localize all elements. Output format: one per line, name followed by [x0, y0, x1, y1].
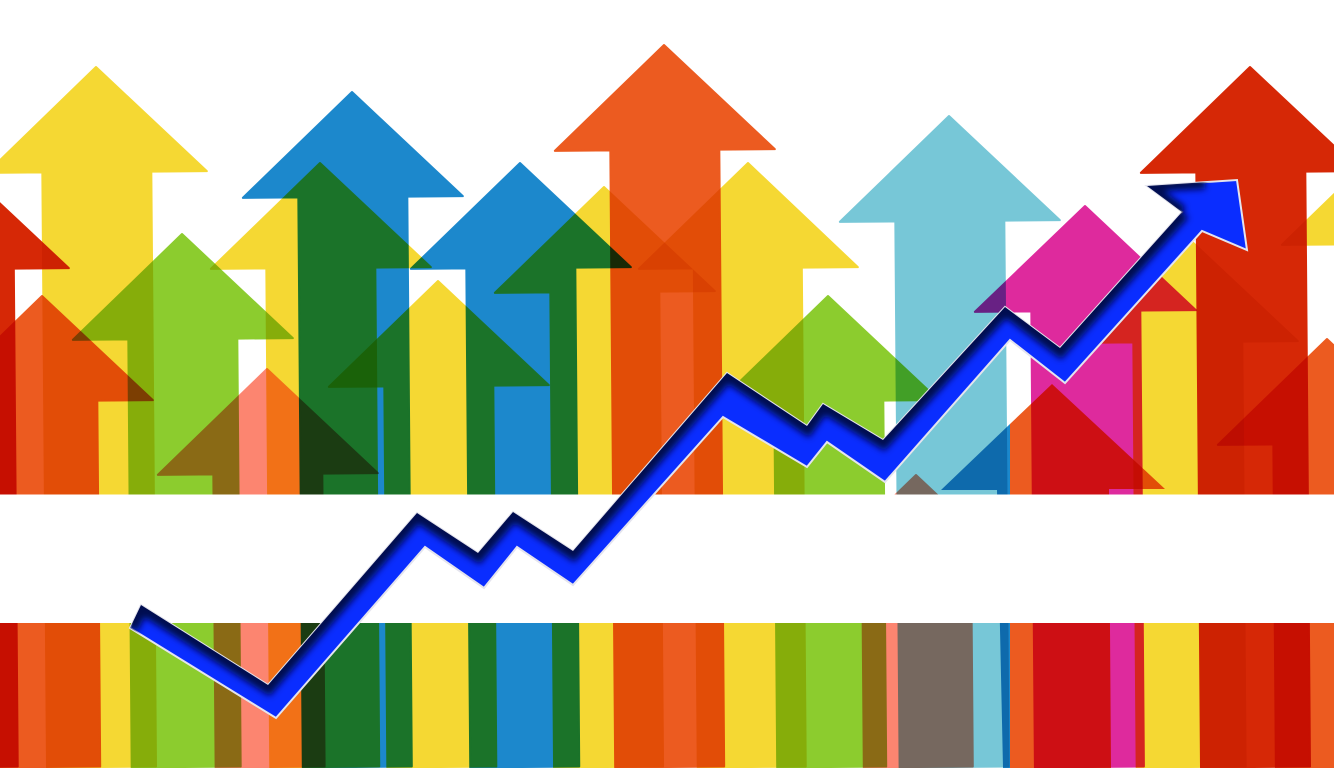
arrow: light green centre right: [740, 295, 928, 768]
arrow: orange part of lower right arrow: [1010, 384, 1165, 768]
arrow: teal: [839, 115, 1064, 768]
arrow: yellow centre right: [638, 162, 862, 768]
arrow: blue part of lower right arrow: [941, 424, 1010, 768]
arrow: yellow top right edge: [1281, 193, 1334, 246]
arrow: tall orange: [554, 44, 780, 768]
arrow: red left edge: [0, 163, 73, 768]
trend line: blue zigzag arrow: [130, 180, 1247, 718]
arrow: yellow centre low: [328, 280, 552, 768]
arrow: yellow far left: [0, 66, 211, 768]
arrow: yellow behind magenta: [1102, 242, 1298, 768]
arrow: red tall right: [1140, 66, 1334, 768]
arrow: yellow behind blue: [210, 162, 435, 768]
arrow: orange left: [0, 295, 156, 768]
arrow: orange right edge: [1217, 338, 1334, 768]
arrow: salmon low: [157, 368, 380, 768]
arrow: salmon small tip: [862, 474, 974, 768]
arrow: light green left: [72, 233, 296, 768]
arrow: yellow behind orange: [494, 186, 719, 768]
arrow: blue: [242, 91, 467, 768]
white horizontal band: [0, 494, 1334, 623]
arrow: blue centre: [410, 162, 635, 768]
arrow: magenta: [974, 205, 1199, 768]
